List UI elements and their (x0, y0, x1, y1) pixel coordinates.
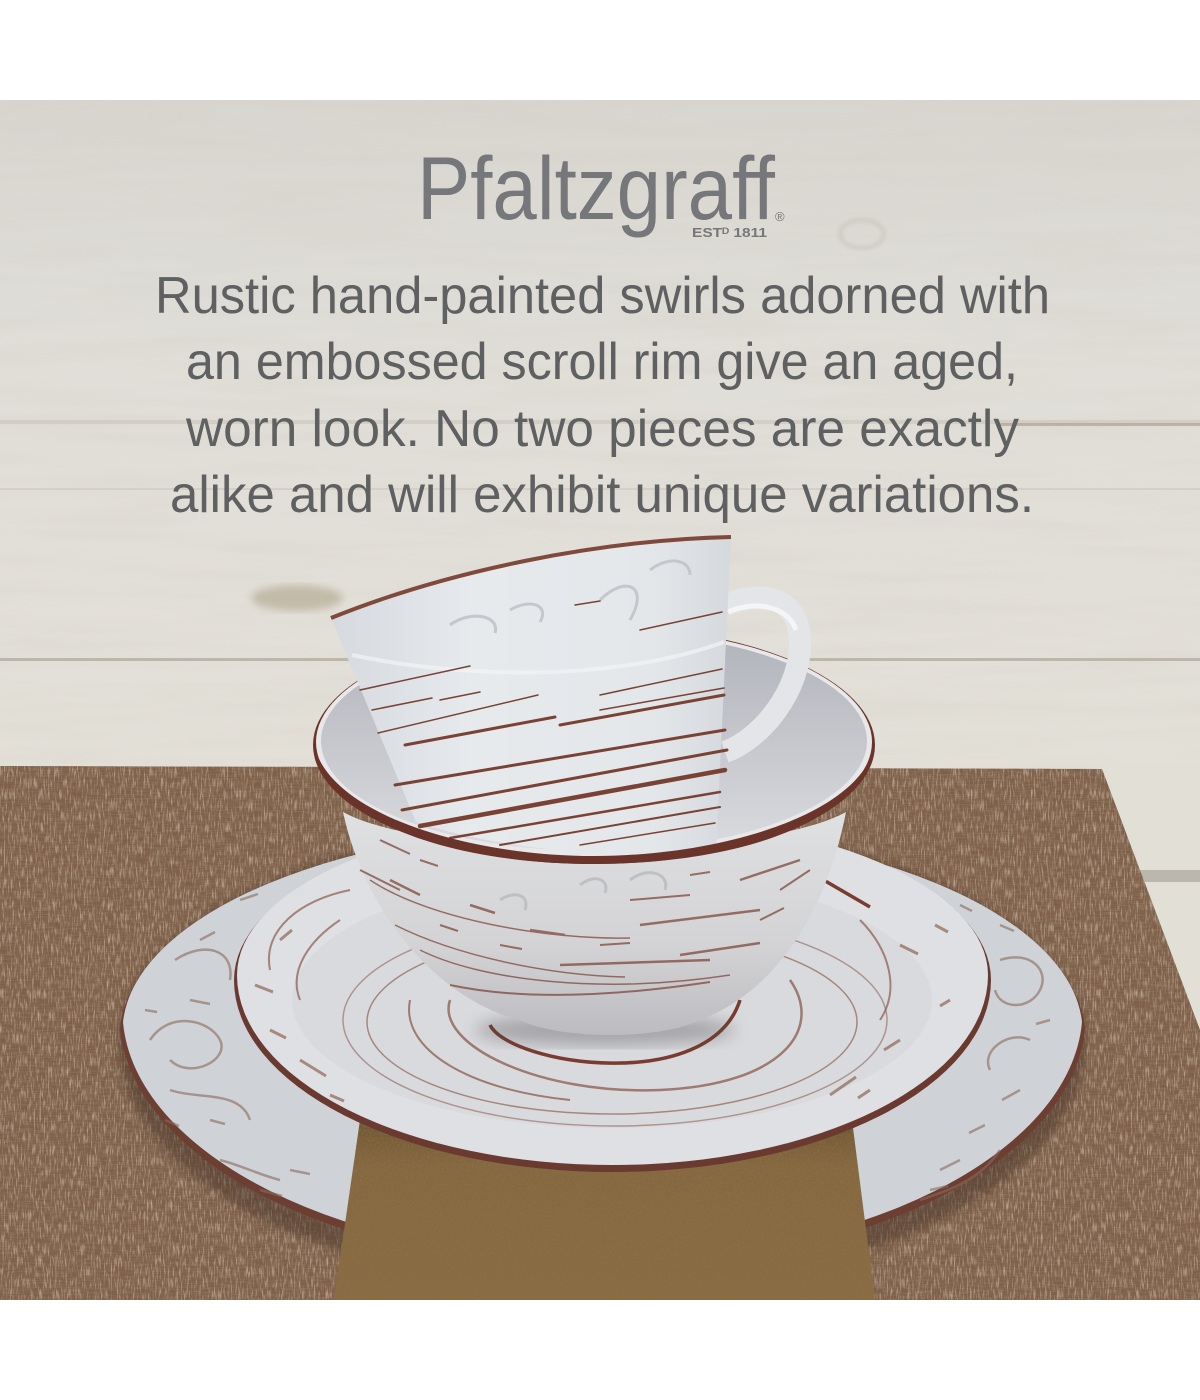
panel: woven placemat (0, 760, 1200, 1300)
icon: folded napkin (330, 1120, 880, 1300)
logo: Pfaltzgraff: Pfaltzgraff (417, 138, 775, 238)
icon: large dinner plate (118, 821, 1086, 1291)
icon: cereal bowl (313, 626, 875, 1046)
panel: wood background (0, 100, 1200, 1040)
logo: Pfaltzgraff: ® (775, 209, 785, 224)
bowl front rim (314, 745, 875, 864)
icon: salad plate (234, 815, 991, 1172)
bowl rim (313, 626, 875, 864)
text block: description: alike and will exhibit unique variations. (170, 466, 1034, 524)
icon: mug handle (725, 597, 800, 752)
text block: description: worn look. No two pieces are exactly (185, 400, 1019, 458)
text block: description: Rustic hand-painted swirls adorned with (155, 267, 1050, 325)
text block: description (155, 267, 1050, 524)
logo: Pfaltzgraff: ESTᴰ 1811 (692, 225, 767, 240)
text block: description: an embossed scroll rim give an aged, (186, 333, 1018, 391)
icon: distressed mug (331, 537, 731, 855)
